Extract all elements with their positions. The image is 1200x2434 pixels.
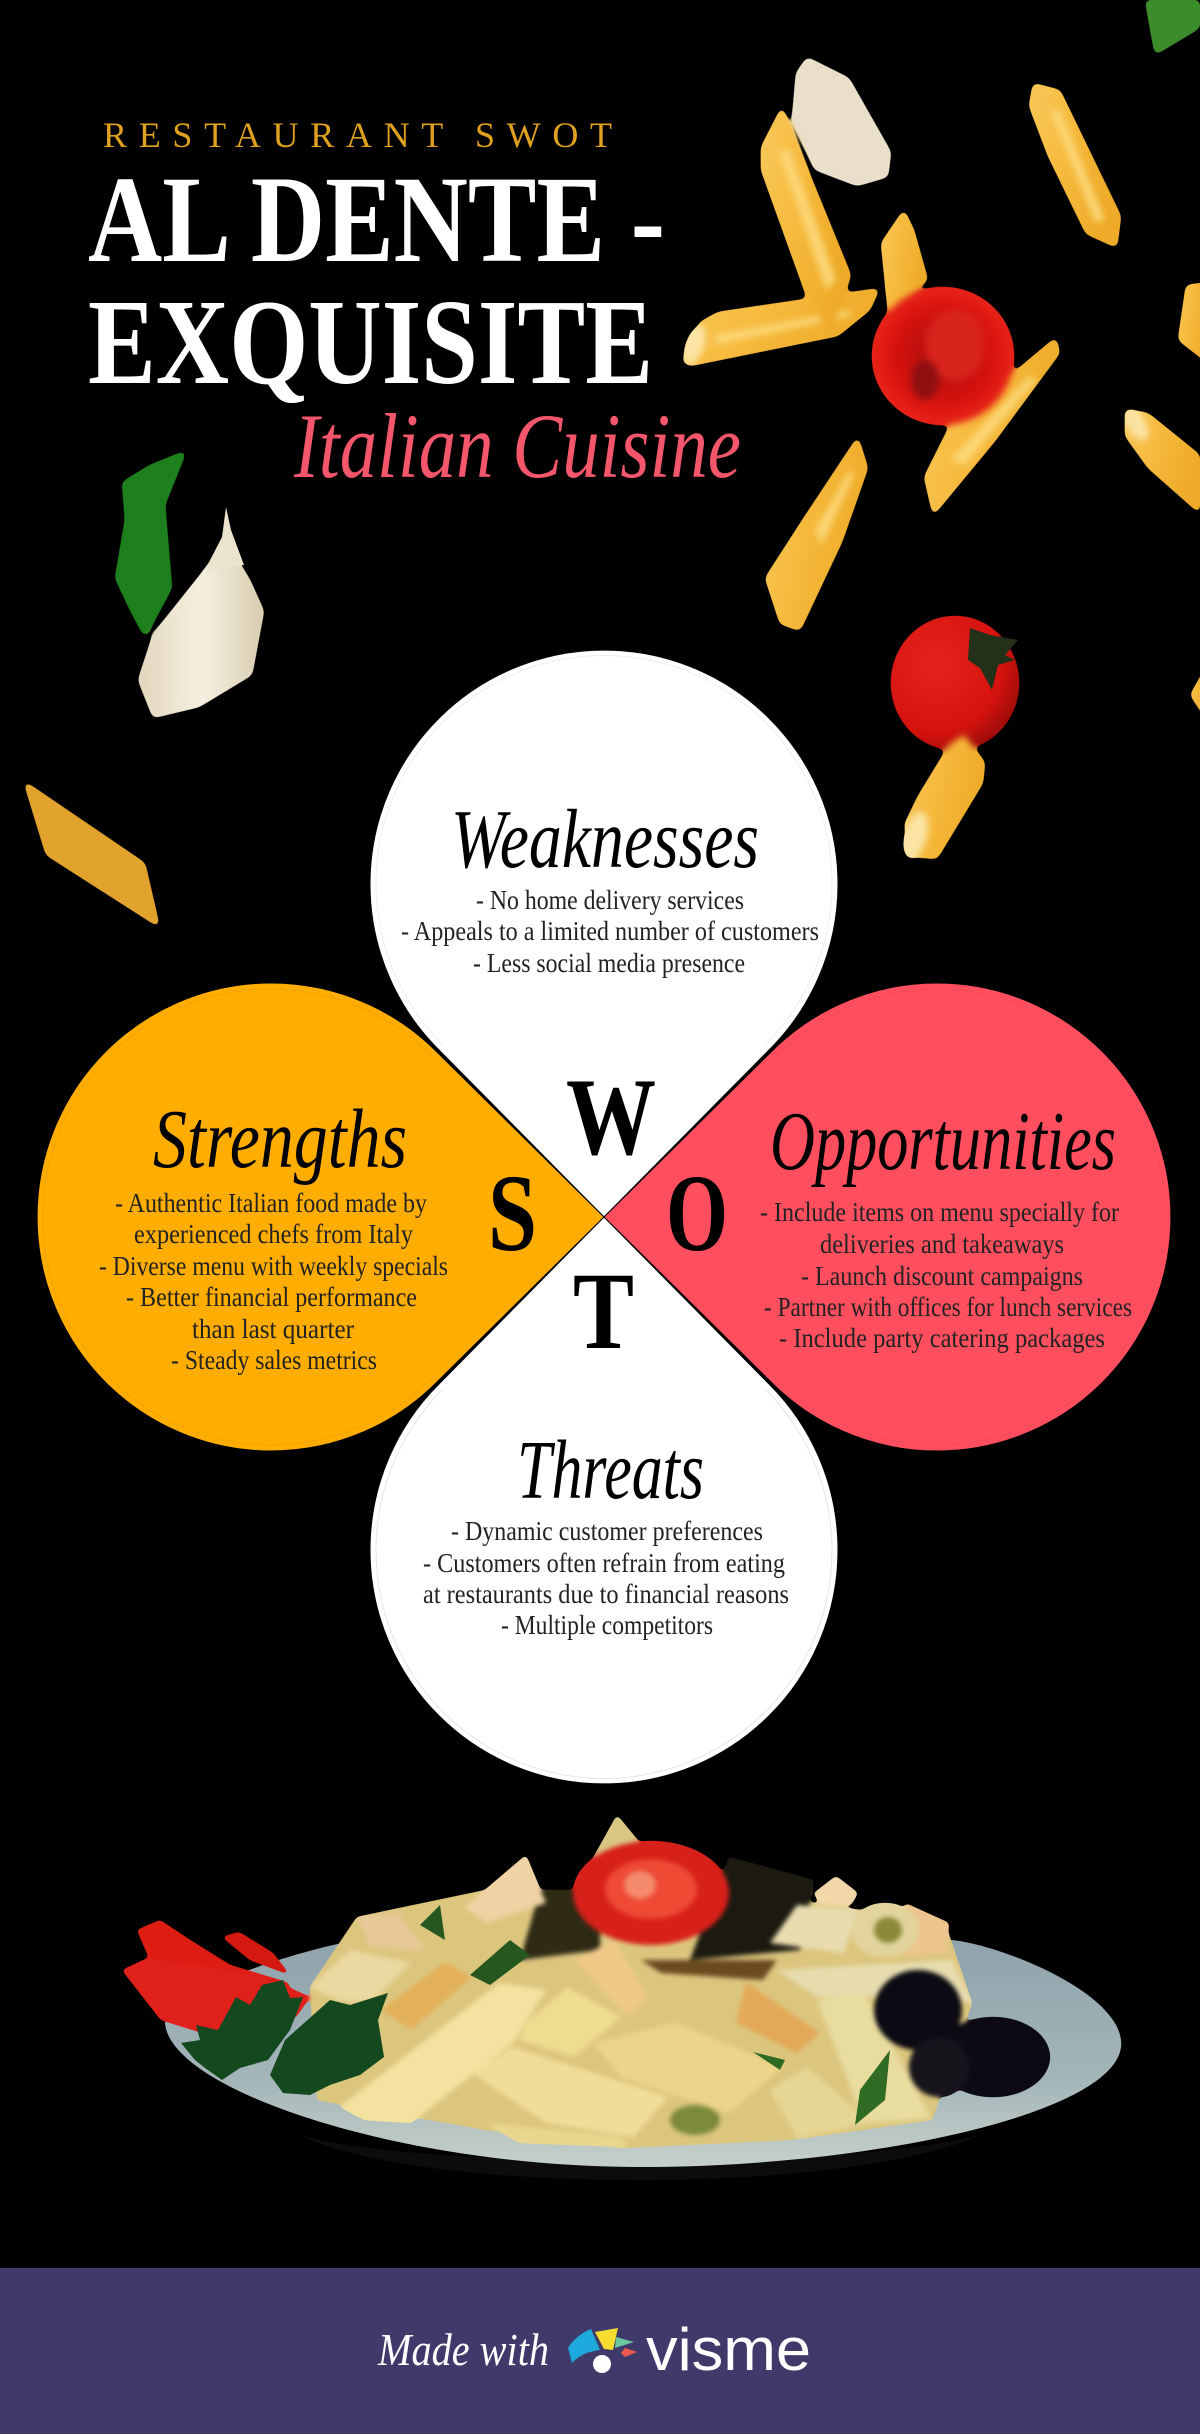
center letters W S O T: T	[573, 1250, 634, 1372]
subtitle: Italian Cuisine	[293, 395, 741, 497]
icon: visme logo	[568, 2328, 637, 2373]
penne left	[23, 780, 160, 928]
petal: opportunities: - Include party catering packages	[779, 1323, 1105, 1353]
leaf left	[115, 450, 187, 638]
penne right edge upper	[1178, 282, 1200, 365]
main title line 2: EXQUISITE	[88, 275, 653, 410]
petal: opportunities: deliveries and takeaways	[820, 1229, 1064, 1259]
petal: strengths: than last quarter	[192, 1314, 354, 1344]
falling ingredients: pasta, tomatoes, garlic, herbs	[23, 0, 1200, 928]
petal: weaknesses: - Less social media presence	[473, 948, 745, 978]
petal: threats: at restaurants due to financial reasons	[423, 1579, 789, 1609]
petal: strengths: - Diverse menu with weekly specials	[99, 1251, 448, 1281]
center letters W S O T: S	[488, 1152, 537, 1274]
tomato half	[872, 287, 1014, 425]
olives	[874, 1970, 962, 2050]
penne center	[765, 436, 868, 631]
title block	[88, 115, 741, 497]
petal: opportunities: - Partner with offices for lunch services	[764, 1292, 1132, 1322]
petal: strengths: - Steady sales metrics	[171, 1345, 377, 1375]
plate under-shadow	[300, 2135, 980, 2180]
penne horizontal	[682, 288, 880, 366]
center letters W S O T	[488, 1056, 728, 1372]
petal: weaknesses: - Appeals to a limited number of customers	[401, 916, 819, 946]
center letters W S O T: W	[566, 1056, 656, 1178]
parsley	[181, 1980, 388, 2095]
petal: threats: Threats	[517, 1424, 704, 1517]
petal: strengths: - Authentic Italian food made by	[115, 1188, 427, 1218]
food base	[310, 1890, 972, 2148]
footer band	[0, 2268, 1200, 2434]
petal: opportunities: - Include items on menu specially for	[760, 1197, 1119, 1227]
penne right of tomato	[924, 337, 1060, 516]
penne behind tomato	[881, 209, 928, 312]
penne top right	[1029, 83, 1121, 248]
red peppers	[137, 1920, 296, 1985]
plate	[165, 1940, 1121, 2167]
petal: strengths: - Better financial performance	[126, 1282, 417, 1312]
kicker: RESTAURANT SWOT	[103, 115, 612, 155]
petal: threats: - Dynamic customer preferences	[451, 1516, 763, 1546]
icon: tomato calyx	[968, 628, 1018, 690]
visme wordmark: visme	[646, 2316, 811, 2383]
petal: threats: - Multiple competitors	[501, 1610, 713, 1640]
herb flecks	[470, 1940, 530, 1985]
petal: threats: - Customers often refrain from eating	[423, 1548, 785, 1578]
SWOT diagram	[37, 650, 1171, 1784]
garlic clove	[138, 540, 264, 718]
petal: opportunities	[604, 983, 1171, 1451]
leaf top right	[1145, 0, 1200, 55]
main title line 1: AL DENTE -	[88, 151, 665, 288]
petal: weaknesses	[370, 650, 838, 1217]
tomato on top	[573, 1841, 729, 1945]
almond shape	[792, 57, 891, 186]
icon: garlic tip	[205, 507, 244, 570]
penne right edge	[1190, 660, 1200, 725]
pasta plate photo	[122, 1815, 1121, 2180]
petal: strengths	[37, 983, 604, 1451]
petal: opportunities: - Launch discount campaigns	[801, 1261, 1083, 1291]
petal: weaknesses: - No home delivery services	[476, 885, 744, 915]
petal: weaknesses: Weaknesses	[451, 793, 759, 886]
made with: Made with	[377, 2324, 549, 2375]
pasta pieces	[592, 1815, 640, 1860]
mushrooms	[690, 1857, 814, 1960]
petal: strengths: Strengths	[153, 1093, 407, 1186]
petal: strengths: experienced chefs from Italy	[134, 1219, 413, 1249]
penne vertical	[761, 106, 851, 333]
center letters W S O T: O	[666, 1152, 728, 1274]
petal: threats	[370, 1217, 838, 1784]
penne under tomato	[904, 735, 985, 859]
whole tomato	[891, 616, 1019, 750]
penne right edge lower	[1125, 409, 1200, 514]
